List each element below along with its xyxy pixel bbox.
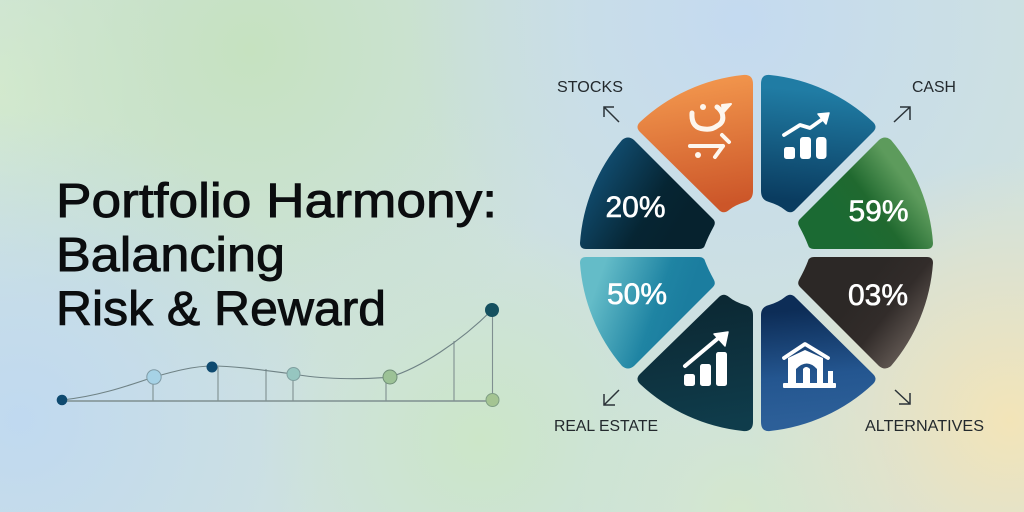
icon: rising bars — [684, 332, 728, 386]
value: 03% — [848, 279, 908, 312]
title: Risk & Reward — [56, 283, 386, 336]
segment: green 59% — [798, 138, 933, 249]
arrow: stocks — [604, 107, 619, 122]
segment: brown 03% — [798, 257, 933, 368]
title: Balancing — [56, 229, 285, 282]
title: Portfolio Harmony: — [56, 175, 497, 228]
segment: orange with exchange icon — [638, 75, 753, 212]
segment: dark teal with rising bars icon — [638, 295, 753, 431]
arrow: alternatives — [895, 390, 910, 404]
segment: blue with growth chart icon — [761, 75, 876, 212]
icon: house — [783, 344, 836, 388]
segment: navy with house icon — [761, 295, 876, 431]
value: 20% — [605, 191, 666, 224]
segment: teal 50% — [580, 257, 715, 368]
value: 50% — [607, 278, 667, 311]
segment: dark navy 20% — [580, 138, 715, 249]
label: alternatives: ALTERNATIVES — [865, 418, 984, 435]
arrow: cash — [894, 107, 910, 122]
donut chart: portfolio allocation — [580, 75, 933, 431]
value: 59% — [848, 195, 909, 228]
label: cash: CASH — [912, 79, 956, 96]
line chart: risk and reward curve — [57, 303, 499, 406]
title — [56, 175, 497, 336]
arrow: real estate — [604, 390, 619, 405]
icon: exchange arrows — [690, 104, 731, 158]
label: real estate: REAL ESTATE — [554, 418, 658, 435]
label: stocks: STOCKS — [557, 79, 623, 96]
icon: growth chart — [784, 113, 829, 159]
